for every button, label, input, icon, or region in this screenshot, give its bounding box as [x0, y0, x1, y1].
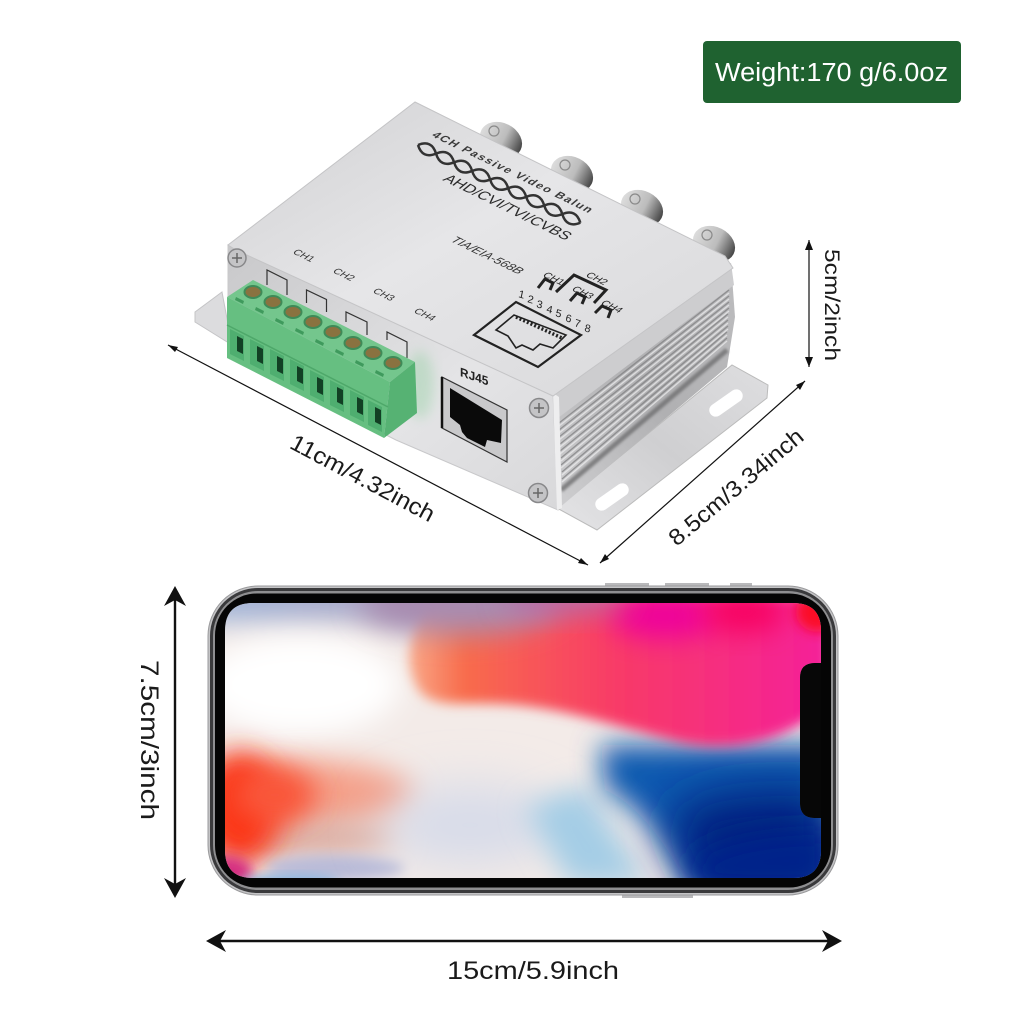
green glow: [406, 351, 434, 419]
lid title: 4CH Passive Video Balun: [429, 130, 597, 216]
weight badge: Weight:170 g/6.0oz: [715, 59, 948, 87]
rj45 pin diagram: 5: [554, 307, 563, 321]
dimension: device length: [168, 345, 588, 565]
rj45 pin diagram: CH1: [540, 271, 567, 287]
screen wallpaper: [225, 603, 821, 878]
notch: [800, 663, 821, 818]
rj45 port: RJ45: [460, 365, 488, 389]
phone body: [208, 586, 838, 895]
green terminal block: [227, 280, 417, 438]
enclosure side with fins: [553, 263, 735, 510]
rj45 pin diagram: 3: [535, 298, 544, 312]
twisted pair logo: [416, 140, 583, 228]
rj45 pin diagram: 2: [526, 293, 535, 307]
dimension: phone width: [206, 930, 842, 985]
channel brackets: [267, 270, 407, 358]
rj45 pin diagram: 4: [545, 303, 554, 317]
enclosure front face: [228, 245, 558, 510]
rj45 pin diagram: 1: [517, 288, 526, 302]
terminal channel labels: CH1: [290, 248, 317, 264]
dimension: device height: [805, 240, 843, 367]
mounting flanges: [195, 292, 768, 530]
rj45 port: [442, 365, 507, 462]
smartphone for scale: [198, 574, 840, 898]
rj45 pin diagram: 7: [573, 317, 582, 331]
dimension: phone height: [135, 586, 186, 898]
rj45 pin diagram: 8: [583, 322, 592, 336]
rj45 pin diagram: 6: [564, 312, 573, 326]
terminal channel labels: CH4: [411, 307, 438, 323]
dimension: device length: 11cm/4.32inch: [286, 429, 439, 527]
terminal wire slots: [230, 329, 382, 432]
terminal channel labels: CH3: [370, 287, 397, 303]
terminal screws: [244, 286, 402, 369]
rj45 pin diagram: [474, 271, 625, 367]
terminal channel labels: [290, 248, 438, 323]
dimension: device width: 8.5cm/3.34inch: [663, 423, 809, 551]
bnc connectors: [474, 115, 741, 269]
weight badge: [703, 41, 961, 103]
rj45 pin diagram: CH3: [569, 285, 596, 301]
product: 4CH passive video balun: [195, 102, 768, 530]
dimension: phone height: 7.5cm/3inch: [135, 660, 163, 820]
lid subtitle: AHD/CVI/TVI/CVBS: [439, 172, 576, 243]
dimension: device height: 5cm/2inch: [820, 249, 843, 361]
rj45 pin diagram: CH4: [598, 299, 625, 315]
enclosure lid: [228, 102, 733, 396]
dimension: phone width: 15cm/5.9inch: [447, 957, 619, 985]
screws: [228, 249, 548, 502]
terminal channel labels: CH2: [330, 267, 357, 283]
rj45 pin diagram: CH2: [583, 271, 610, 287]
standard label: TIA/EIA-568B: [448, 234, 527, 276]
side buttons: [605, 583, 752, 898]
dimension: device width: [600, 381, 809, 563]
